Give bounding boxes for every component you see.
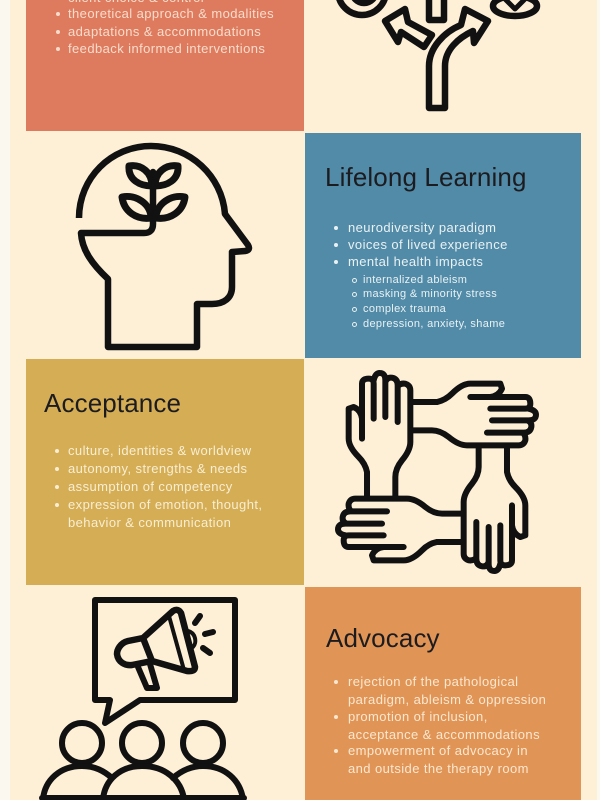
icon: head with plant xyxy=(76,142,252,350)
text: promotion of inclusion xyxy=(348,709,540,742)
panel: top coral section xyxy=(26,0,304,131)
icon: branching road arrows xyxy=(336,0,540,112)
heading: acceptance: Acceptance xyxy=(44,388,181,418)
text: masking and minority stress: masking & minority stress xyxy=(363,288,497,300)
text: neurodiversity paradigm: neurodiversity paradigm xyxy=(348,220,496,235)
icon: four interlocking hands xyxy=(335,370,539,574)
text: depression anxiety shame: depression, anxiety, shame xyxy=(363,318,505,330)
text: complex trauma: complex trauma xyxy=(363,303,446,315)
text: rejection of the pathological paradigm xyxy=(348,674,546,707)
text: culture identities worldview: culture, identities & worldview xyxy=(68,443,252,458)
text: internalized ableism: internalized ableism xyxy=(363,274,467,286)
text: theoretical approach bullet: theoretical approach & modalities xyxy=(68,6,274,21)
text: feedback bullet: feedback informed interventions xyxy=(68,41,265,56)
text: empowerment of advocacy: and outside the therapy room xyxy=(348,761,529,776)
text: expression of emotion xyxy=(68,497,262,530)
panel: acceptance xyxy=(26,359,304,585)
heading: lifelong learning: Lifelong Learning xyxy=(325,162,527,192)
text: promotion of inclusion: promotion of inclusion, xyxy=(348,709,488,724)
icon: megaphone speech bubble and audience xyxy=(39,597,247,800)
text: empowerment of advocacy: empowerment of advocacy in xyxy=(348,743,528,758)
text: rejection of the pathological paradigm: paradigm, ableism & oppression xyxy=(348,692,546,707)
text: autonomy strengths needs: autonomy, strengths & needs xyxy=(68,461,247,476)
panel: advocacy xyxy=(305,587,581,800)
text: expression of emotion: behavior & communication xyxy=(68,515,231,530)
text: expression of emotion: expression of emotion, thought, xyxy=(68,497,262,512)
text: adaptations bullet: adaptations & accommodations xyxy=(68,24,261,39)
heading: advocacy: Advocacy xyxy=(326,623,440,653)
text: assumption of competency: assumption of competency xyxy=(68,479,233,494)
text: voices of lived experience: voices of lived experience xyxy=(348,237,508,252)
text: rejection of the pathological paradigm: rejection of the pathological xyxy=(348,674,518,689)
text: promotion of inclusion: acceptance & accommodations xyxy=(348,727,540,742)
panel: lifelong learning xyxy=(305,133,581,358)
text: empowerment of advocacy xyxy=(348,743,529,776)
text: mental health impacts: mental health impacts xyxy=(348,254,483,269)
